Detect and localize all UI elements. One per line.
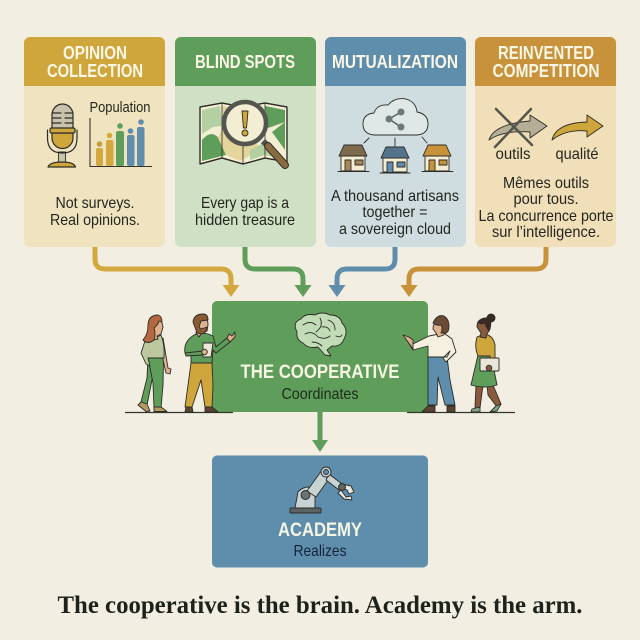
heading: opinion collection: COLLECTION [47,60,143,81]
panel: blind spots [175,37,316,247]
heading: blind spots: BLIND SPOTS [195,51,295,72]
arrow: competition to cooperative [400,247,546,297]
text: qualite label: qualité [556,146,599,163]
icon: crossed-out arrow [489,109,547,147]
figure: woman left [138,315,171,412]
text: competition caption: pour tous. [514,191,578,208]
figure: man with tablet [185,314,235,412]
text: bottom tagline: The cooperative is the brain. Academy is the arm. [58,592,582,619]
heading: the cooperative: THE COOPERATIVE [240,361,400,383]
icon: robot arm [290,467,354,513]
text: mutualization caption: together = [362,204,428,221]
panel: the cooperative [212,301,428,412]
arrow: blind spots to cooperative [245,247,312,297]
panel: academy [212,456,428,568]
icon: microphone [48,104,77,167]
text: coordinates: Coordinates [282,386,358,403]
ground line right [407,412,515,414]
text: competition caption: sur l’intelligence. [492,224,600,241]
heading: reinvented competition: COMPETITION [492,60,600,81]
heading: opinion collection [47,42,143,81]
icon: quality arrow [552,115,603,140]
text: mutualization caption: a sovereign cloud [339,221,451,238]
arrow: mutualization to cooperative [328,247,395,297]
text: competition caption: La concurrence porte [478,208,614,225]
text: blind spots caption: Every gap is a [201,195,289,212]
text: competition caption: Mêmes outils [503,175,589,192]
text: outils label: outils [496,146,530,163]
text: mutualization caption: A thousand artisans [331,188,459,205]
panel: mutualization [325,37,466,247]
text: opinion caption: Not surveys. [56,195,134,212]
heading: opinion collection: OPINION [63,42,127,63]
icon: brain [295,313,346,356]
icon: map with magnifier [200,102,287,165]
ground line left [125,412,233,414]
heading: reinvented competition [492,42,600,81]
text: competition caption [478,175,614,241]
text: mutualization caption [331,188,459,238]
arrow: opinion to cooperative [95,247,240,297]
heading: academy: ACADEMY [278,519,362,541]
text: realizes: Realizes [294,543,346,560]
heading: reinvented competition: REINVENTED [498,42,594,63]
figure: woman in white shirt [403,316,456,412]
icon: cloud with share symbol [363,99,428,146]
text: blind spots caption: hidden treasure [195,212,295,229]
text: blind spots caption [195,195,295,229]
icon: shop centre [380,147,410,173]
text: opinion caption: Real opinions. [50,212,140,229]
text: population label: Population [90,99,150,116]
icon: shop right [422,145,453,172]
icon: shop left [338,145,369,172]
arrow: cooperative to academy [312,412,328,452]
text: opinion caption [50,195,140,229]
panel: reinvented competition [475,37,616,247]
panel: opinion collection [24,37,165,247]
figure: woman with bun [471,314,501,412]
chart: population bars [90,118,152,166]
heading: mutualization: MUTUALIZATION [332,51,458,72]
